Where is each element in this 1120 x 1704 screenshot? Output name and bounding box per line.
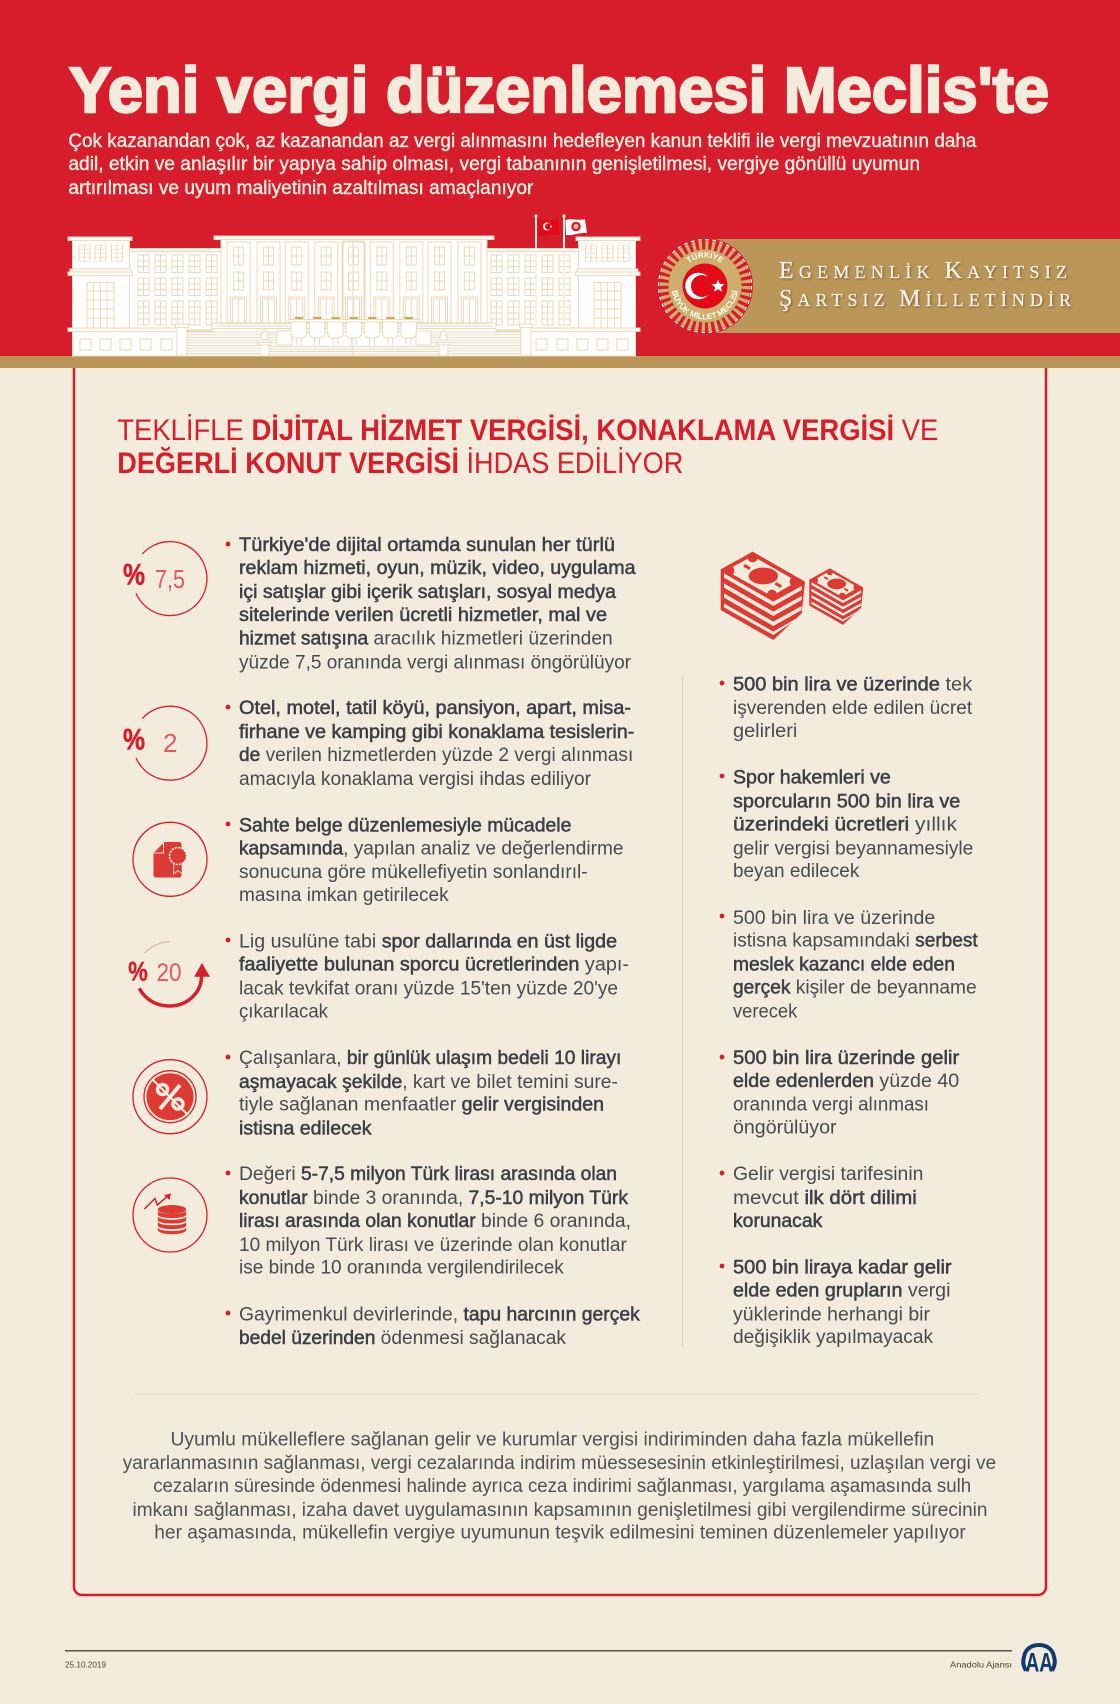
icon: ulaşım menfaat istisnası — [133, 1060, 207, 1134]
parliament seal: BÜYÜK MİLLET MECLİSİ — [672, 290, 738, 320]
right bullet: ücret gelirleri: 500 bin lira ve üzerinde tek — [733, 674, 973, 695]
right bullet: serbest meslek: 500 bin lira ve üzerinde — [733, 908, 935, 929]
bullet: konut vergisi dilimleri: ise binde 10 oranında vergilendirilecek — [239, 1258, 564, 1279]
horizontal divider — [135, 1394, 978, 1395]
right bullet: spor hakemleri: gelir vergisi beyannamesiyle — [733, 838, 973, 859]
right bullet: serbest meslek — [720, 908, 978, 1022]
closing paragraph: imkanı sağlanması, izaha davet uygulamasının kapsamının genişletilmesi gibi vergilendirme sürecinin — [132, 1500, 988, 1521]
gold motto banner — [705, 239, 1120, 333]
icon: yüzde 2: 2 — [163, 728, 177, 758]
icon: Anadolu Ajansı logo: AA — [1026, 1648, 1053, 1678]
right bullet: yüzde 40: 500 bin lira üzerinde gelir — [733, 1048, 960, 1069]
right bullet: serbest meslek: istisna kapsamındaki serbest — [733, 931, 978, 952]
bullet: gayrimenkul devirleri: bedel üzerinden ödenmesi sağlanacak — [239, 1328, 566, 1349]
bullet: konut vergisi dilimleri — [226, 1164, 631, 1279]
bullet: dijital hizmet vergisi: içi satışlar gibi içerik satışları, sosyal medya — [239, 582, 616, 603]
closing paragraph — [123, 1429, 996, 1544]
right bullet: serbest meslek: gerçek kişiler de beyanname — [733, 977, 977, 998]
right bullet: yüzde 40: öngörülüyor — [733, 1118, 837, 1138]
footer date: 25.10.2019 — [65, 1660, 106, 1670]
bullet: konaklama vergisi: firhane ve kamping gibi konaklama tesislerin- — [239, 722, 634, 743]
bullet: konaklama vergisi — [226, 698, 634, 790]
icon: yüzde 7,5 — [123, 542, 207, 616]
closing paragraph: her aşamasında, mükellefin vergiye uyumunun teşvik edilmesini teminen düzenlemeler yapılıyor — [154, 1523, 966, 1544]
icon: yüzde 2 — [123, 706, 207, 780]
bullet: spor ücretleri tevkifat: lacak tevkifat oranı yüzde 15'ten yüzde 20'ye — [239, 978, 618, 999]
bullet: spor ücretleri tevkifat: çıkarılacak — [239, 1001, 328, 1022]
right bullet: 500 bin liraya kadar: 500 bin liraya kadar gelir — [733, 1258, 952, 1279]
bullet: ulaşım bedeli: aşmayacak şekilde, kart ve bilet temini sure- — [239, 1072, 618, 1093]
icon: yüzde 2: % — [123, 724, 145, 756]
right bullet: gelir vergisi tarifesi: Gelir vergisi tarifesinin — [733, 1164, 923, 1185]
bullet: dijital hizmet vergisi: sitelerinde verilen ücretli hizmetler, mal ve — [239, 605, 607, 626]
right bullet: gelir vergisi tarifesi: mevcut ilk dört dilimi — [733, 1188, 917, 1209]
icon: money stacks — [721, 552, 863, 640]
header intro text — [68, 131, 977, 199]
header intro text: adil, etkin ve anlaşılır bir yapıya sahip olması, vergi tabanının genişletilmesi, vergiye gönüllü uyumun — [68, 154, 920, 175]
bullet: konut vergisi dilimleri: konutlar binde 3 oranında, 7,5-10 milyon Türk — [239, 1188, 628, 1209]
bullet: konut vergisi dilimleri: lirası arasında olan konutlar binde 6 oranında, — [239, 1211, 631, 1232]
bullet: dijital hizmet vergisi — [226, 535, 636, 674]
right bullet: ücret gelirleri: gelirleri — [733, 721, 797, 742]
right bullet: spor hakemleri: beyan edilecek — [733, 861, 860, 882]
bullet: ulaşım bedeli: istisna edilecek — [239, 1119, 372, 1140]
bullet: ulaşım bedeli: Çalışanlara, bir günlük ulaşım bedeli 10 lirayı — [239, 1048, 621, 1069]
footer source: Anadolu Ajansı — [950, 1660, 1012, 1670]
main content panel frame — [74, 368, 1046, 1595]
parliament seal — [658, 238, 753, 334]
section heading: TEKLİFLE DİJİTAL HİZMET VERGİSİ, KONAKLAMA VERGİSİ VE — [117, 414, 938, 447]
icon: yüzde 20 artış — [128, 942, 210, 1006]
icon: yüzde 7,5: 7,5 — [155, 564, 185, 594]
closing paragraph: yararlanmasının sağlanması, vergi cezalarında indirim müessesesinin etkinleştirilmesi, uzlaşılan vergi ve — [123, 1453, 996, 1474]
right bullet: spor hakemleri: sporcuların 500 bin lira ve — [733, 792, 960, 813]
bullet: konaklama vergisi: amacıyla konaklama vergisi ihdas ediliyor — [239, 769, 592, 790]
right bullet: spor hakemleri: Spor hakemleri ve — [733, 768, 891, 789]
right bullet: ücret gelirleri — [720, 674, 973, 742]
parliament seal: TÜRKİYE — [686, 251, 724, 263]
bullet: dijital hizmet vergisi: reklam hizmeti, oyun, müzik, video, uygulama — [239, 558, 636, 579]
icon: sahte belge — [133, 822, 207, 896]
bullet: sahte belge: masına imkan getirilecek — [239, 885, 449, 906]
title: Yeni vergi düzenlemesi Meclis'te — [69, 54, 1049, 126]
right bullet: 500 bin liraya kadar: yüklerinde herhangi bir — [733, 1304, 931, 1325]
right bullet: yüzde 40: oranında vergi alınması — [733, 1095, 929, 1116]
icon: yüzde 20 artış: 20 — [156, 959, 182, 987]
right bullet: yüzde 40: elde edenlerden yüzde 40 — [733, 1071, 959, 1092]
parliament building illustration — [68, 236, 640, 356]
header intro text: artırılması ve uyum maliyetinin azaltılması amaçlanıyor — [68, 178, 534, 199]
bullet: konaklama vergisi: Otel, motel, tatil köyü, pansiyon, apart, misa- — [239, 698, 631, 719]
right bullet: spor hakemleri — [720, 768, 973, 882]
right bullet: serbest meslek: verecek — [733, 1001, 798, 1022]
bullet: gayrimenkul devirleri: Gayrimenkul devirlerinde, tapu harcının gerçek — [239, 1304, 640, 1325]
motto text: Ş ARTSIZ M İLLETİNDİR — [779, 286, 1071, 312]
bullet: ulaşım bedeli — [226, 1048, 621, 1140]
section heading: DEĞERLİ KONUT VERGİSİ İHDAS EDİLİYOR — [117, 446, 683, 480]
flags on poles — [534, 214, 587, 328]
right bullet: 500 bin liraya kadar: değişiklik yapılmayacak — [733, 1327, 934, 1348]
bullet: sahte belge — [226, 816, 624, 906]
bullet: konut vergisi dilimleri: 10 milyon Türk lirası ve üzerinde olan konutlar — [239, 1235, 627, 1256]
bullet: gayrimenkul devirleri — [226, 1304, 640, 1349]
bullet: spor ücretleri tevkifat — [226, 932, 629, 1022]
closing paragraph: Uyumlu mükelleflere sağlanan gelir ve kurumlar vergisi indiriminden daha fazla mükellefin — [170, 1429, 934, 1450]
right bullet: 500 bin liraya kadar: elde eden grupların vergi — [733, 1280, 950, 1302]
bullet: dijital hizmet vergisi: hizmet satışına aracılık hizmetleri üzerinden — [239, 629, 613, 650]
bullet: spor ücretleri tevkifat: faaliyette bulunan sporcu ücretlerinden yapı- — [239, 954, 629, 976]
right bullet: 500 bin liraya kadar — [720, 1258, 952, 1348]
motto text: E GEMENLİK K AYITSIZ — [779, 258, 1067, 284]
red header band — [0, 0, 1120, 356]
bullet: sahte belge: kapsamında, yapılan analiz ve değerlendirme — [239, 838, 624, 859]
footer rule — [65, 1650, 1012, 1652]
bullet: spor ücretleri tevkifat: Lig usulüne tabi spor dallarında en üst ligde — [239, 932, 617, 953]
right bullet: spor hakemleri: üzerindeki ücretleri yıllık — [733, 814, 958, 835]
right bullet: gelir vergisi tarifesi: korunacak — [733, 1211, 823, 1232]
header intro text: Çok kazanandan çok, az kazanandan az vergi alınmasını hedefleyen kanun teklifi ile vergi mevzuatının daha — [68, 131, 977, 152]
bullet: sahte belge: sonucuna göre mükellefiyetin sonlandırıl- — [239, 862, 588, 883]
right bullet: ücret gelirleri: işverenden elde edilen ücret — [733, 698, 973, 719]
bullet: konaklama vergisi: de verilen hizmetlerden yüzde 2 vergi alınması — [239, 745, 633, 766]
bullet: sahte belge: Sahte belge düzenlemesiyle mücadele — [239, 816, 571, 836]
gold divider strip — [0, 356, 1120, 368]
right bullet: yüzde 40 — [720, 1048, 960, 1138]
right bullet: serbest meslek: meslek kazancı elde eden — [733, 954, 955, 976]
column divider — [682, 676, 683, 1347]
icon: değerli konut vergisi — [133, 1178, 207, 1252]
section heading — [117, 414, 938, 480]
icon: yüzde 7,5: % — [123, 558, 145, 592]
bullet: dijital hizmet vergisi: Türkiye'de dijital ortamda sunulan her türlü — [239, 535, 615, 556]
right bullet: gelir vergisi tarifesi — [720, 1164, 923, 1232]
bullet: dijital hizmet vergisi: yüzde 7,5 oranında vergi alınması öngörülüyor — [239, 653, 632, 674]
closing paragraph: cezaların süresinde ödenmesi halinde ayrıca ceza indirimi sağlanması, yargılama aşamasında sulh — [153, 1476, 971, 1497]
motto text — [779, 258, 1071, 312]
bullet: konut vergisi dilimleri: Değeri 5-7,5 milyon Türk lirası arasında olan — [239, 1164, 617, 1185]
icon: yüzde 20 artış: % — [128, 956, 148, 986]
bullet: ulaşım bedeli: tiyle sağlanan menfaatler gelir vergisinden — [239, 1095, 604, 1116]
icon: Anadolu Ajansı logo — [1023, 1645, 1055, 1678]
